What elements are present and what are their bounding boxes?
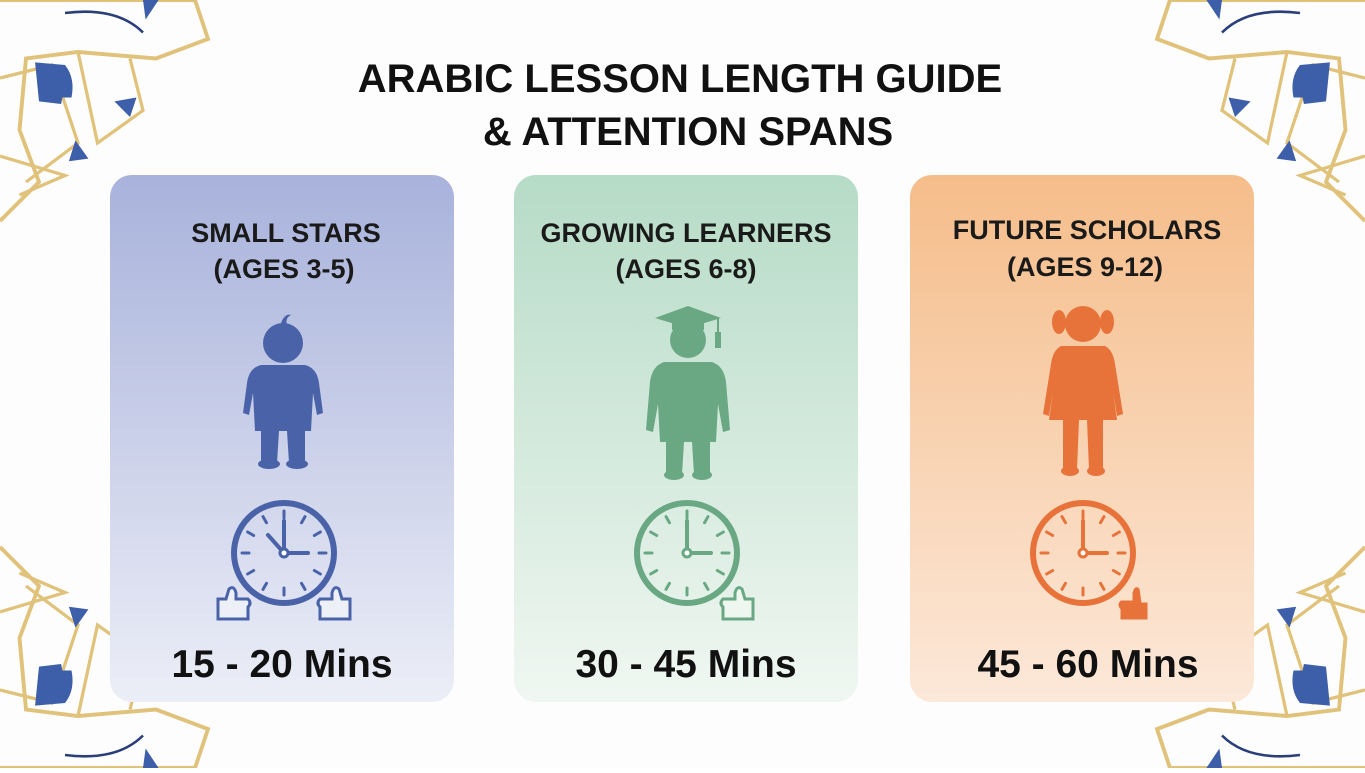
ornament: bottom-left corner: [0, 547, 208, 768]
icon: toddler: [243, 315, 323, 469]
duration: 45-60: 45 - 60 Mins: [977, 643, 1199, 686]
heading: small stars: SMALL STARS: [191, 218, 381, 248]
heading: small stars: [191, 218, 381, 284]
panel: future scholars: [910, 175, 1254, 702]
heading: growing learners: (AGES 6-8): [615, 254, 757, 284]
heading: growing learners: GROWING LEARNERS: [540, 218, 832, 248]
ornament: top-right corner: [1157, 0, 1365, 221]
ornament: top-left corner: [0, 0, 208, 221]
heading: future scholars: FUTURE SCHOLARS: [953, 215, 1221, 245]
icon: clock with thumb: [637, 503, 753, 619]
icon: girl: [1043, 306, 1123, 476]
heading: future scholars: (AGES 9-12): [1007, 252, 1163, 282]
title: [358, 57, 1002, 154]
duration: 15-20: 15 - 20 Mins: [171, 643, 393, 686]
icon: clock with thumbs: [218, 503, 350, 619]
icon: clock with thumb: [1033, 503, 1147, 619]
panel: growing learners: [514, 175, 858, 702]
title: & ATTENTION SPANS: [483, 110, 893, 154]
heading: future scholars: [953, 215, 1221, 282]
heading: growing learners: [540, 218, 832, 284]
title: ARABIC LESSON LENGTH GUIDE: [358, 57, 1002, 101]
ornament: bottom-right corner: [1157, 547, 1365, 768]
duration: 30-45: 30 - 45 Mins: [575, 643, 797, 686]
panel: small stars: [110, 175, 454, 702]
icon: graduate child: [646, 306, 730, 480]
heading: small stars: (AGES 3-5): [213, 254, 355, 284]
